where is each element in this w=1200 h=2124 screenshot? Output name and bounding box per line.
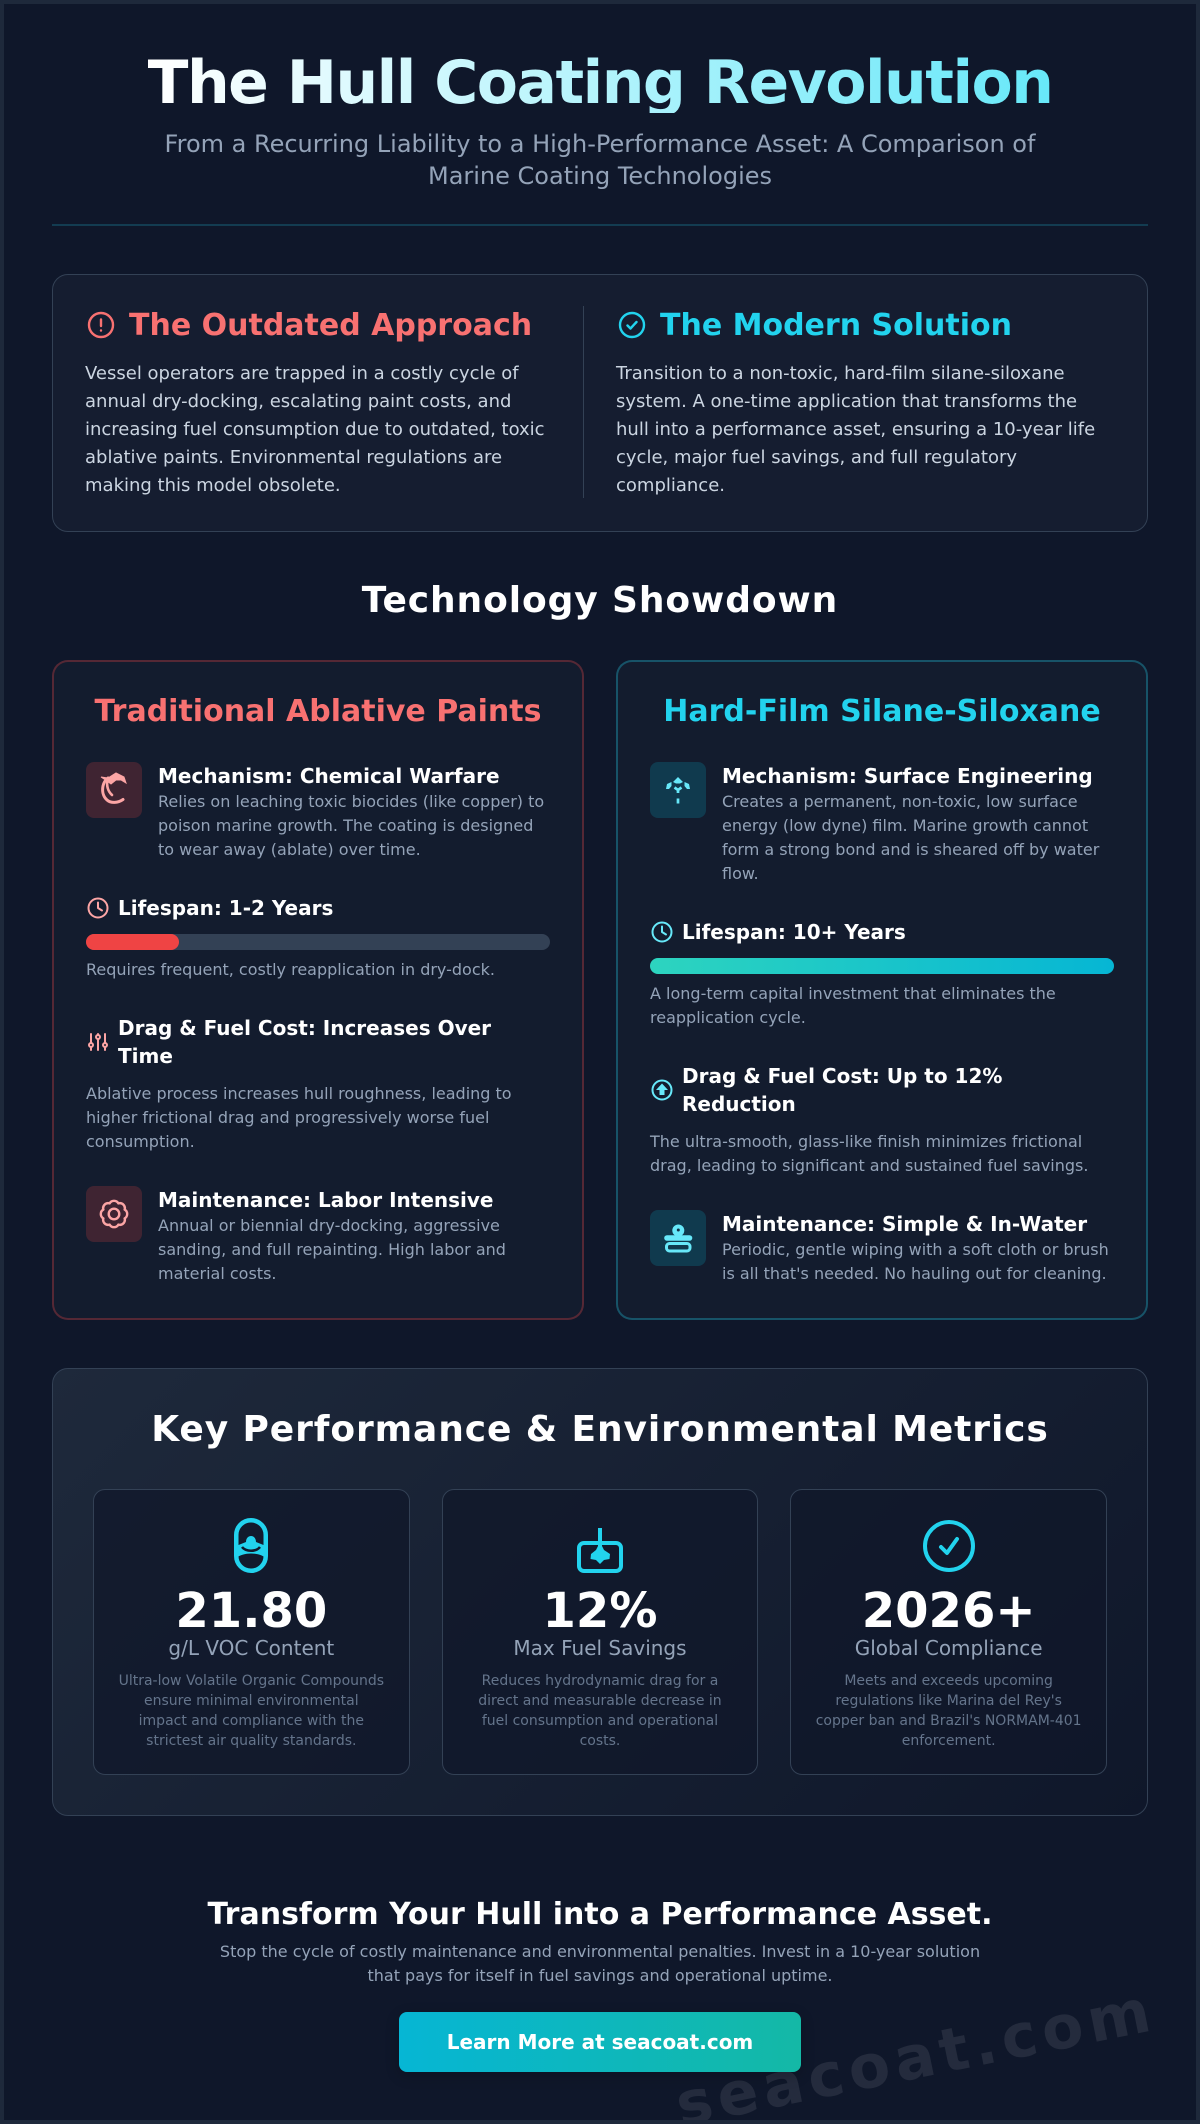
text: drag title: Time <box>118 1044 173 1068</box>
text: VOC value: 21.80 <box>175 1583 327 1639</box>
heading: traditional: Traditional Ablative Paints <box>94 694 541 729</box>
text: compliance description: enforcement. <box>902 1733 996 1749</box>
text: outdated approach: annual dry-docking, escalating paint costs, and <box>85 391 511 412</box>
icon: clock <box>88 898 108 918</box>
text: drag description: higher frictional drag and progressively worse fuel <box>86 1108 489 1127</box>
text: modern solution <box>616 363 1095 496</box>
text: maintenance title: Maintenance: Labor Intensive <box>158 1188 494 1212</box>
text: outdated approach: ablative paints. Environmental regulations are <box>85 447 502 468</box>
text: VOC description: impact and compliance with the <box>139 1713 364 1729</box>
text: maintenance description: material costs. <box>158 1264 276 1283</box>
text: compliance description: Meets and exceeds upcoming <box>844 1673 1053 1689</box>
text: maintenance description: Annual or biennial dry-docking, aggressive <box>158 1216 500 1235</box>
heading: metrics: Key Performance & Environmental Metrics <box>151 1409 1049 1450</box>
text: maintenance description: sanding, and full repainting. High labor and <box>158 1240 506 1259</box>
text: compliance label: Global Compliance <box>855 1636 1043 1660</box>
text: mechanism description: Creates a permanent, non-toxic, low surface <box>722 792 1078 811</box>
text: mechanism description: Relies on leaching toxic biocides (like copper) to <box>158 792 544 811</box>
text: fuel value: 12% <box>543 1583 657 1639</box>
text: VOC description <box>119 1673 384 1749</box>
icon: compliance <box>923 1520 975 1572</box>
icon: check circle <box>618 312 646 338</box>
subtitle: From a Recurring Liability to a High-Performance Asset: A Comparison of <box>165 130 1035 158</box>
text: mechanism title: Mechanism: Chemical Warfare <box>158 764 500 788</box>
text: outdated approach: making this model obsolete. <box>85 475 341 496</box>
text: mechanism description <box>158 792 544 859</box>
text: mechanism description: energy (low dyne) film. Marine growth cannot <box>722 816 1088 835</box>
card: VOC <box>93 1489 410 1775</box>
icon: sliders <box>88 1033 108 1051</box>
text: modern solution: compliance. <box>616 475 725 496</box>
icon: wipe <box>650 1210 706 1266</box>
text: outdated approach: increasing fuel consumption due to outdated, toxic <box>85 419 545 440</box>
text: maintenance description: is all that's needed. No hauling out for cleaning. <box>722 1264 1107 1283</box>
text: VOC description: Ultra-low Volatile Organic Compounds <box>119 1673 384 1689</box>
text: drag title: Drag & Fuel Cost: Increases Over <box>118 1016 491 1040</box>
text: lifespan title: Lifespan: 10+ Years <box>682 920 906 944</box>
text: compliance description <box>816 1673 1082 1749</box>
text: outdated approach <box>85 363 545 496</box>
text: compliance description: regulations like Marina del Rey's <box>835 1693 1062 1709</box>
text: fuel description: fuel consumption and operational <box>482 1713 718 1729</box>
text: drag title <box>118 1016 491 1068</box>
heading: technology showdown: Technology Showdown <box>362 580 838 621</box>
text: lifespan description <box>650 984 1056 1027</box>
text: drag description: drag, leading to significant and sustained fuel savings. <box>650 1156 1088 1175</box>
text: call to action <box>220 1942 980 1985</box>
card: fuel savings <box>442 1489 758 1775</box>
text: VOC description: strictest air quality standards. <box>146 1733 356 1749</box>
text: maintenance description: Periodic, gentle wiping with a soft cloth or brush <box>722 1240 1109 1259</box>
icon: chemical <box>86 762 142 818</box>
text: call to action: Stop the cycle of costly maintenance and environmental penalties. Invest in a 10-year solution <box>220 1942 980 1961</box>
text: lifespan description: A long-term capital investment that eliminates the <box>650 984 1056 1003</box>
text: drag description <box>650 1132 1088 1175</box>
text: maintenance description <box>158 1216 506 1283</box>
text: modern solution: cycle, major fuel savings, and full regulatory <box>616 447 1017 468</box>
text: compliance value: 2026+ <box>862 1583 1036 1639</box>
text: VOC label: g/L VOC Content <box>168 1636 334 1660</box>
icon: surface <box>650 762 706 818</box>
text: drag description: The ultra-smooth, glass-like finish minimizes frictional <box>650 1132 1082 1151</box>
text: fuel label: Max Fuel Savings <box>513 1636 687 1660</box>
text: modern solution: Transition to a non-toxic, hard-film silane-siloxane <box>616 363 1065 384</box>
panel: hard-film silane-siloxane <box>616 660 1148 1320</box>
text: fuel description: direct and measurable decrease in <box>478 1693 722 1709</box>
icon: fuel savings <box>577 1528 623 1573</box>
icon: alert circle <box>88 312 114 338</box>
text: lifespan description: reapplication cycle. <box>650 1008 806 1027</box>
text: drag description: Ablative process increases hull roughness, leading to <box>86 1084 512 1103</box>
text: mechanism description: to wear away (ablate) over time. <box>158 840 421 859</box>
text: mechanism description: flow. <box>722 864 759 883</box>
text: drag title: Drag & Fuel Cost: Up to 12% <box>682 1064 1002 1088</box>
text: outdated approach: Vessel operators are trapped in a costly cycle of <box>85 363 519 384</box>
text: drag title <box>682 1064 1002 1116</box>
panel: traditional ablative paints <box>52 660 584 1320</box>
bar: lifespan <box>86 934 550 950</box>
text: fuel description <box>478 1673 722 1749</box>
heading: hard-film: Hard-Film Silane-Siloxane <box>663 694 1101 729</box>
panel: metrics <box>52 1368 1148 1816</box>
button: Learn More at seacoat.com <box>447 2030 753 2054</box>
icon: arrow up circle <box>652 1080 672 1100</box>
heading: modern solution: The Modern Solution <box>660 308 1012 343</box>
text: call to action: that pays for itself in fuel savings and operational uptime. <box>367 1966 833 1985</box>
text: maintenance title: Maintenance: Simple & In-Water <box>722 1212 1087 1236</box>
text: modern solution: hull into a performance asset, ensuring a 10-year life <box>616 419 1095 440</box>
text: fuel description: costs. <box>580 1733 620 1749</box>
heading: outdated approach: The Outdated Approach <box>129 308 532 343</box>
text: mechanism description: form a strong bond and is sheared off by water <box>722 840 1099 859</box>
text: drag title: Reduction <box>682 1092 796 1116</box>
text: maintenance description <box>722 1240 1109 1283</box>
text: compliance description: copper ban and Brazil's NORMAM-401 <box>816 1713 1082 1729</box>
button <box>399 2012 801 2072</box>
text: fuel description: Reduces hydrodynamic drag for a <box>482 1673 718 1689</box>
text: lifespan description: Requires frequent, costly reapplication in dry-dock. <box>86 960 495 979</box>
heading: call to action: Transform Your Hull into a Performance Asset. <box>208 1897 992 1932</box>
bar: lifespan <box>650 958 1114 974</box>
panel: intro <box>52 274 1148 532</box>
text: mechanism description <box>722 792 1100 883</box>
text: mechanism title: Mechanism: Surface Engineering <box>722 764 1093 788</box>
text: mechanism description: poison marine growth. The coating is designed <box>158 816 533 835</box>
text: drag description <box>86 1084 512 1151</box>
title: The Hull Coating Revolution <box>148 48 1052 118</box>
subtitle <box>165 130 1036 190</box>
icon: VOC <box>234 1518 268 1573</box>
text: lifespan title: Lifespan: 1-2 Years <box>118 896 333 920</box>
text: VOC description: ensure minimal environmental <box>144 1693 359 1709</box>
text: drag description: consumption. <box>86 1132 195 1151</box>
icon: clock <box>652 922 672 942</box>
icon: gear <box>86 1186 142 1242</box>
subtitle: Marine Coating Technologies <box>428 162 772 190</box>
card: compliance <box>790 1489 1107 1775</box>
text: modern solution: system. A one-time application that transforms the <box>616 391 1077 412</box>
